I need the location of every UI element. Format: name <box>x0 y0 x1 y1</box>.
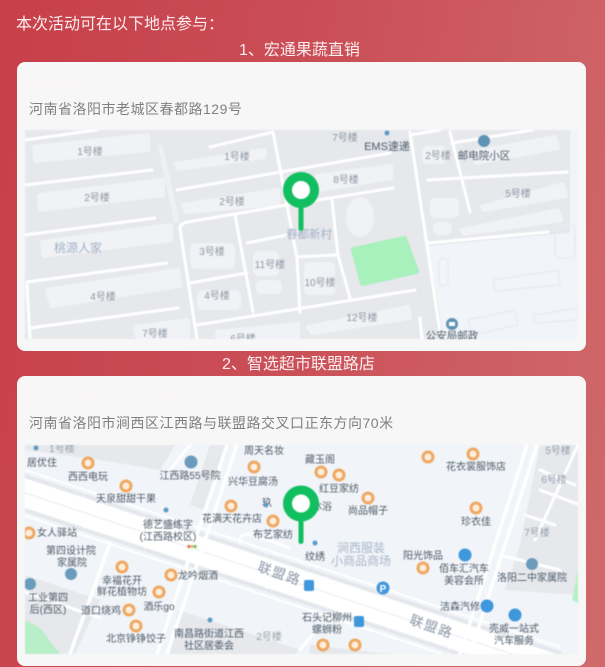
map: location 2: P <box>380 584 387 595</box>
map: location 2: 酒乐go <box>143 601 175 613</box>
map: location 1: 10号楼 <box>304 276 336 289</box>
heading: location 2: 2、智选超市联盟路店 <box>222 356 375 373</box>
map: location 2: 居优住 <box>27 456 57 469</box>
map: location 2: 6号楼 <box>541 473 567 486</box>
map: location 1: 12号楼 <box>346 311 378 324</box>
map: location 2: 涧西服装 <box>337 541 385 555</box>
map: location 1: 2号楼 <box>219 195 245 208</box>
map: location 2: 江西路55号院 <box>159 469 221 482</box>
heading: intro: 本次活动可在以下地点参与： <box>16 16 224 33</box>
map: location 2: 2号楼 <box>256 630 282 643</box>
map: location 2: 鲜花植物坊 <box>97 585 147 598</box>
address text: 河南省洛阳市涧西区江西路与联盟路交叉口正东方向70米 <box>29 415 394 431</box>
map: location 2: 壳威一站式 <box>489 622 539 635</box>
map: location 2: 佰车汇汽车 <box>439 562 489 575</box>
map: location 1: 11号楼 <box>255 258 285 271</box>
map: location 1: 4号楼 <box>90 290 116 303</box>
map: location 1: 7号楼 <box>332 131 358 144</box>
green area <box>354 239 416 283</box>
map: location 2: 家属院 <box>57 556 87 569</box>
icon: traffic light <box>186 544 198 549</box>
faint place name: 联盟小商品市场（第3门） <box>30 391 215 408</box>
map: location 2: 沐浴 <box>312 500 332 513</box>
map: location 2 <box>24 444 578 654</box>
map: location 2: 德艺盛练字 <box>143 518 193 531</box>
map: location 2: 螺蛳粉 <box>312 623 342 636</box>
map: location 2: 藏玉阁 <box>305 453 335 466</box>
map: location 2: 道口烧鸡 <box>81 604 121 617</box>
map: location 2: 珍衣佳 <box>461 515 491 528</box>
map: location 1: 2号楼 <box>425 149 451 162</box>
map: location 2: 北京铮铮饺子 <box>106 632 166 645</box>
map: location 2: 洛阳二中家属院 <box>497 571 567 584</box>
map: location 2: 布艺家纺 <box>253 528 293 541</box>
map: location 2: 玖 <box>262 496 272 509</box>
map: location 1: 2号楼 <box>84 191 110 204</box>
map: location 2: 汽车服务 <box>494 634 534 647</box>
icon: location pin <box>288 176 314 231</box>
map: location 1: 桃源人家 <box>54 240 102 255</box>
map: location 2: 石头记柳州 <box>302 611 352 624</box>
map: location 2: 7号楼 <box>524 526 550 539</box>
map: location 2: 第四设计院 <box>46 544 96 557</box>
icons: orange shops <box>24 449 481 650</box>
icon: location pin <box>288 490 314 544</box>
map: location 2: 社区居委会 <box>184 639 234 652</box>
map: location 1 <box>25 130 578 340</box>
map: location 2: 5号楼 <box>545 445 571 457</box>
map: location 1: 5号楼 <box>505 187 531 200</box>
map: location 2: 南昌路街道江西 <box>174 627 244 640</box>
map: location 2: 西西电玩 <box>68 470 108 483</box>
map: location 2: 工业第四 <box>28 591 68 604</box>
map: location 1: 3号楼 <box>199 245 225 258</box>
map: location 1: 4号楼 <box>204 289 230 302</box>
map: location 2: 小商品商场 <box>331 553 391 568</box>
map: location 2: 龙吟烟酒 <box>178 569 218 582</box>
heading: location 1: 1、宏通果蔬直销 <box>239 42 360 59</box>
map: location 2: 纹绣 <box>305 550 325 563</box>
address text: 河南省洛阳市老城区春都路129号 <box>29 101 242 117</box>
panel: location 2 card <box>17 376 586 666</box>
map: location 2: 后(西区) <box>30 604 66 616</box>
panel: location 1 card <box>17 62 586 351</box>
map: location 2: 花满天花卉店 <box>202 512 262 525</box>
map: location 2: 洁森汽修 <box>440 600 480 613</box>
map: location 1: 1号楼 <box>224 150 250 163</box>
faint place name: 春都新村 <box>30 77 94 94</box>
map: location 2: (江西路校区) <box>140 530 196 543</box>
map: location 2: 周天名妆 <box>244 445 284 457</box>
icons: map points <box>384 130 490 330</box>
map: location 1: EMS速递 <box>364 139 410 153</box>
icons: blue points <box>24 446 538 627</box>
map: location 2: 花衣裳服饰店 <box>446 460 506 473</box>
map: location 1: 8号楼 <box>333 173 359 186</box>
map: location 2: 尚品帽子 <box>348 504 388 517</box>
map: location 1: 邮电院小区 <box>458 149 510 162</box>
map: location 1: 1号楼 <box>77 145 103 158</box>
map: location 2: 红豆家纺 <box>319 482 359 495</box>
road: 联盟路 <box>25 445 580 667</box>
map: location 1: 春都新村 <box>286 227 332 241</box>
map: location 2: 美容会所 <box>444 574 484 587</box>
map: location 2: 阳光饰品 <box>403 549 443 562</box>
map: location 2: 联盟路 <box>408 612 455 641</box>
map: location 2: 幸福花开 <box>102 574 142 587</box>
map: location 2: 女人驿站 <box>37 526 77 539</box>
map: location 2: 联盟路 <box>256 559 303 588</box>
map: location 2: 兴华豆腐汤 <box>228 475 278 488</box>
map: location 2: 天泉甜甜干果 <box>96 492 156 505</box>
